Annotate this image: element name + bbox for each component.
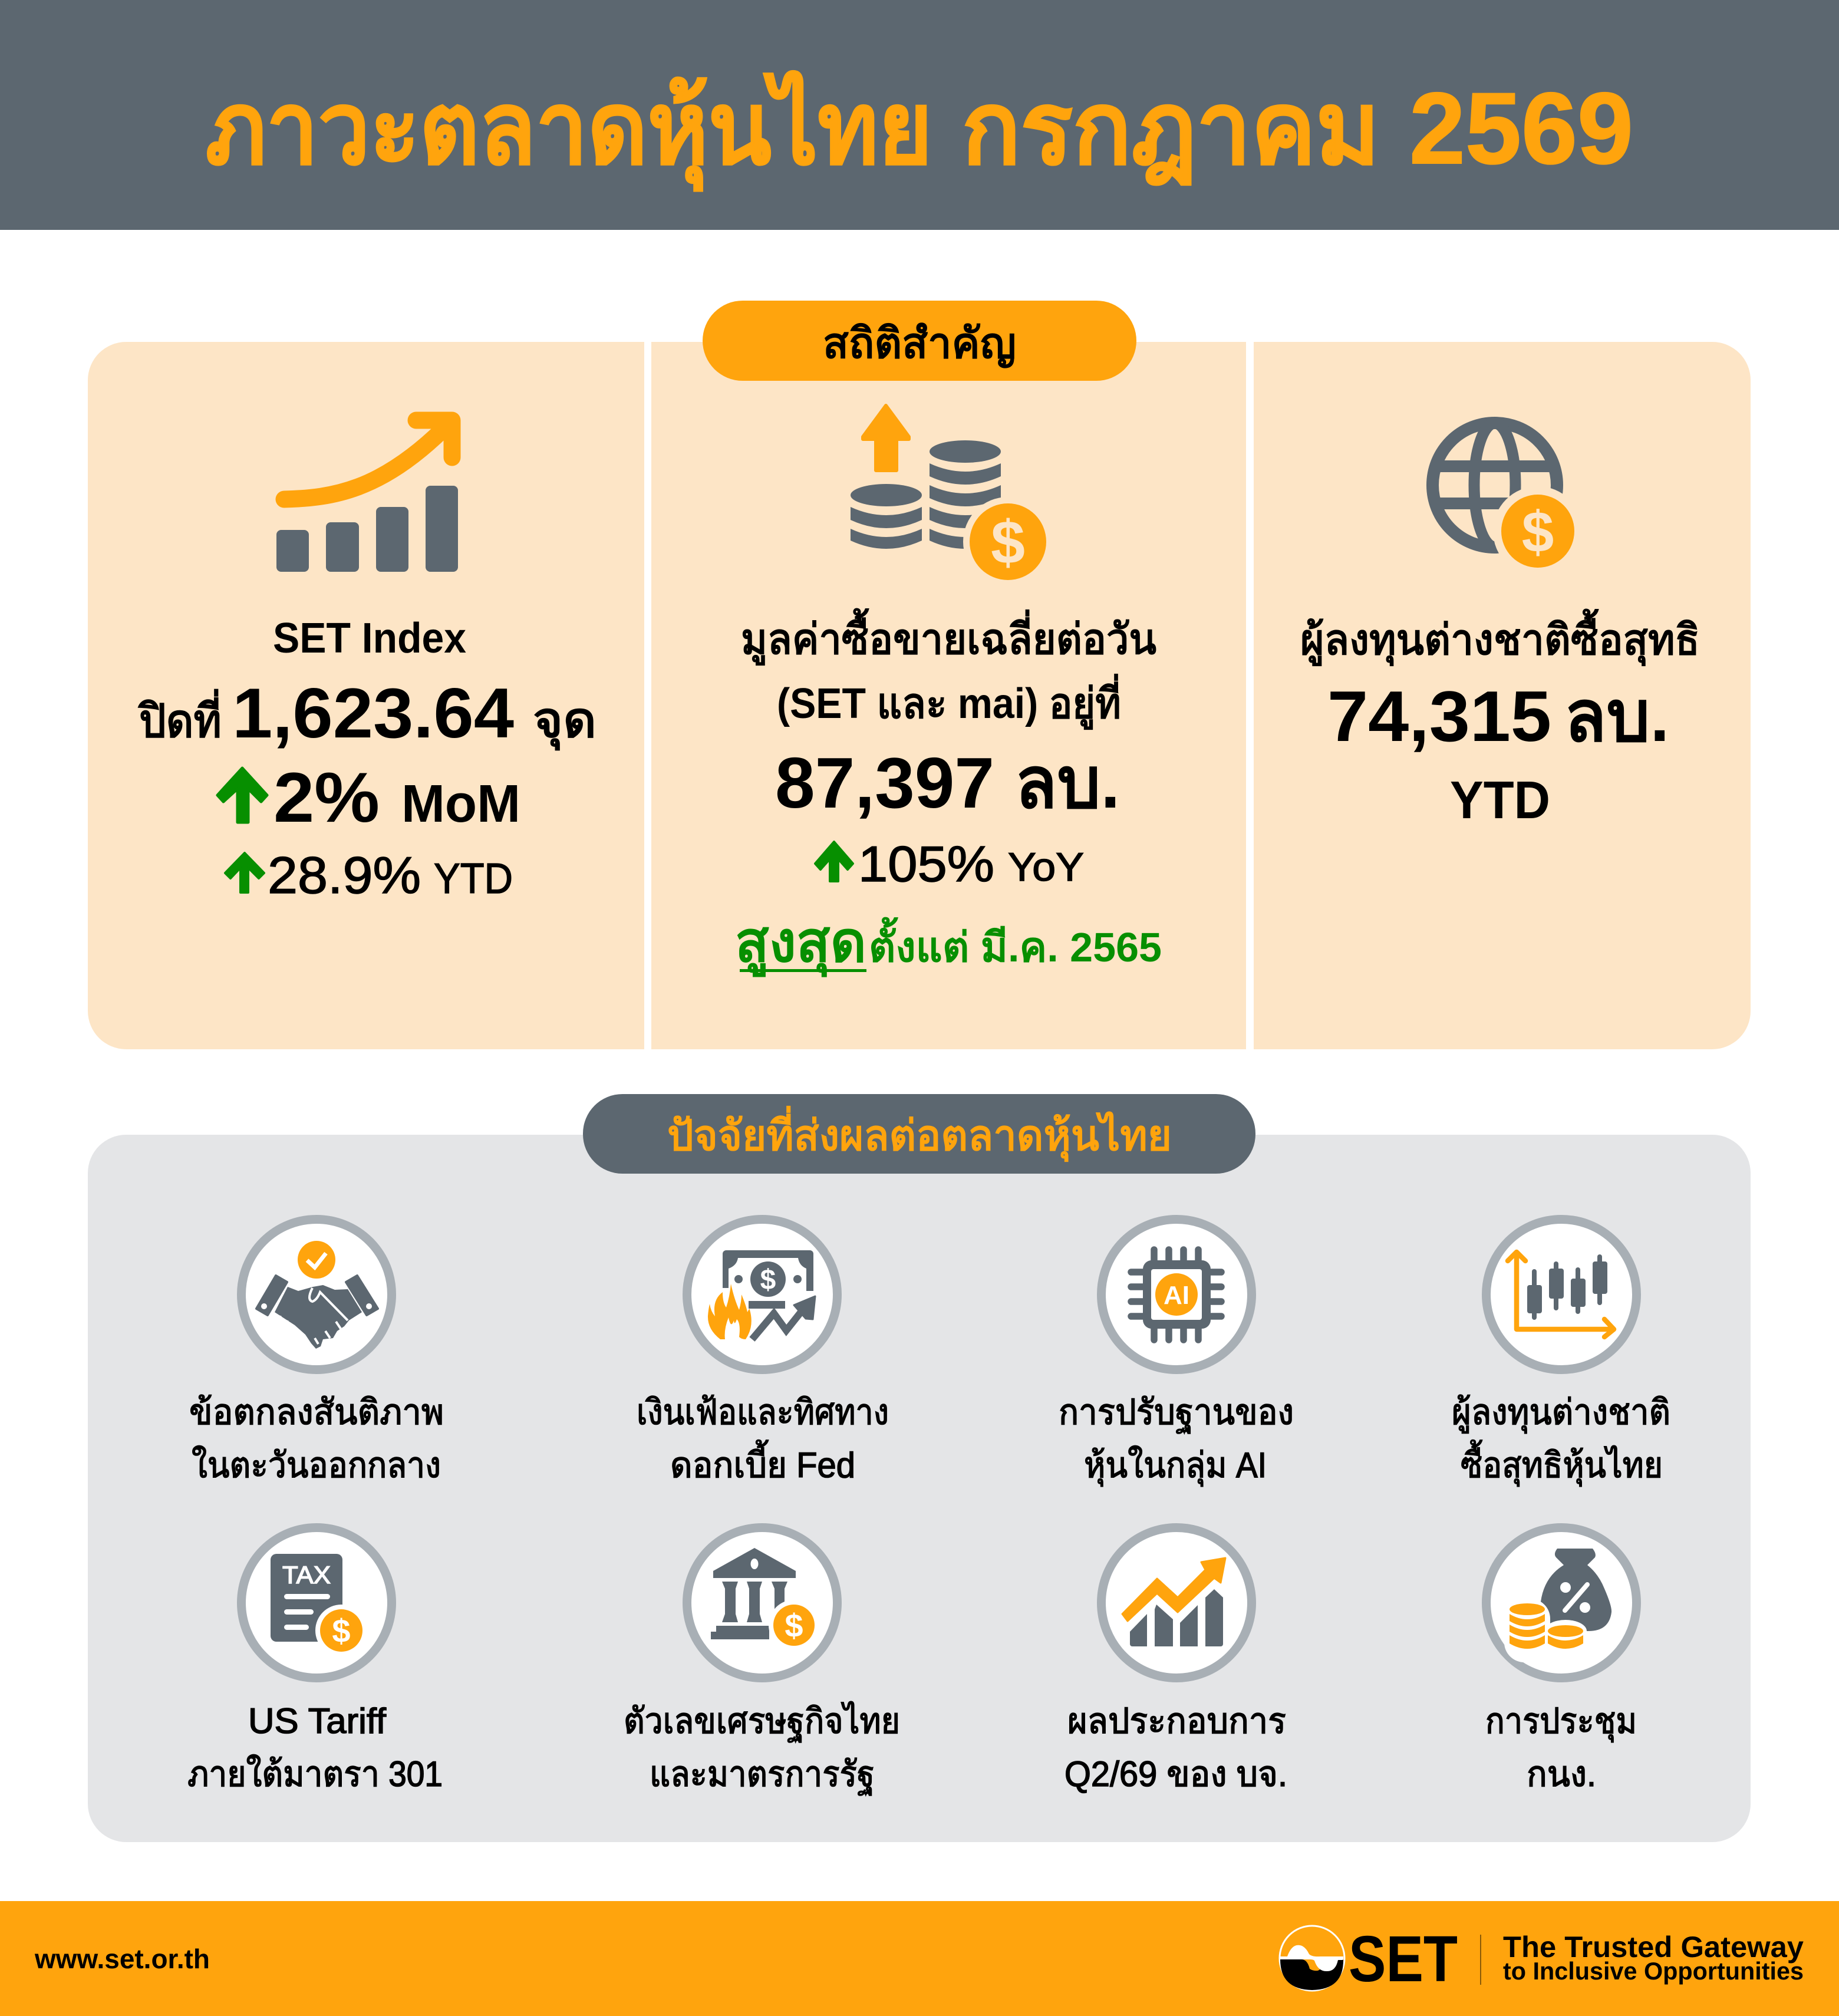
icon: tax document: $ [332, 1612, 351, 1649]
label [624, 1701, 900, 1796]
note: highest since March 2565: สูงสุด [735, 911, 866, 977]
label: average daily trading value [741, 608, 1156, 730]
label: foreign net buy: ผู้ลงทุนต่างชาติซื้อสุทธิ [1300, 608, 1700, 667]
label: average daily trading value: มูลค่าซื้อขายเฉลี่ยต่อวัน [741, 608, 1156, 666]
value: 74,315 [1327, 676, 1669, 756]
factor: Thai economy and state measures [624, 1528, 900, 1796]
icon: AI chip [1101, 1219, 1252, 1370]
stat card: foreign net buy [1300, 423, 1700, 830]
factor: inflation and Fed rate [637, 1219, 889, 1485]
factor: foreign net buy of Thai shares [1452, 1219, 1670, 1487]
label: เงินเฟ้อและทิศทาง [637, 1392, 889, 1432]
icon: AI chip: AI [1164, 1281, 1189, 1310]
icon: handshake [242, 1219, 391, 1370]
icon: tax document: TAX [282, 1561, 331, 1589]
icon: banknote flame chart: $ [760, 1264, 776, 1296]
label: Q2/69 ของ บจ. [1064, 1754, 1287, 1794]
title [206, 71, 1633, 192]
icon: bank with coin: $ [785, 1607, 803, 1644]
label: การประชุม [1485, 1701, 1637, 1742]
heading pill: market factors: ปัจจัยที่ส่งผลต่อตลาดหุ้นไทย [667, 1105, 1172, 1162]
closing value: 1,623.64 [232, 674, 514, 753]
label: ผลประกอบการ [1067, 1701, 1286, 1741]
change: YTD: 28.9% [268, 846, 421, 904]
change: YoY [858, 836, 1084, 892]
header band [0, 0, 1839, 230]
period: YTD: YTD [1450, 771, 1550, 830]
label: ซื้อสุทธิหุ้นไทย [1461, 1439, 1663, 1487]
arrow: up MoM [217, 768, 267, 822]
label: average daily trading value: (SET และ mai) อยู่ที่ [777, 673, 1121, 730]
arrow: up YoY [815, 842, 853, 881]
label: ในตะวันออกกลาง [192, 1445, 441, 1485]
factor: AI stock re-rating [1059, 1219, 1294, 1487]
tagline: The Trusted Gateway [1503, 1931, 1804, 1964]
icon: money bag with coins [1487, 1528, 1636, 1678]
label [1452, 1392, 1670, 1487]
title: ภาวะตลาดหุ้นไทย [206, 71, 932, 192]
change: YTD: YTD [434, 855, 513, 902]
icon: globe with coin [1432, 423, 1583, 576]
arrow: up YTD [225, 853, 264, 892]
change: YoY: YoY [1008, 845, 1084, 890]
icon: banknote flame chart [687, 1219, 837, 1370]
closing value [137, 674, 596, 753]
value: 87,397: 87,397 [775, 743, 994, 823]
icon: growth chart [1101, 1528, 1252, 1678]
icon: bank with coin [687, 1528, 837, 1678]
change: YTD [268, 846, 513, 904]
note: highest since March 2565 [735, 911, 1162, 977]
closing value: จุด [533, 692, 596, 751]
label: การปรับฐานของ [1059, 1392, 1294, 1434]
factor: Middle East peace deal [189, 1219, 444, 1485]
tagline [1503, 1931, 1804, 1985]
tagline: to Inclusive Opportunities [1503, 1957, 1804, 1985]
heading pill: key statistics [703, 301, 1136, 381]
change: MoM: 2% [273, 758, 380, 837]
label [1059, 1392, 1294, 1487]
label: หุ้นในกลุ่ม AI [1084, 1445, 1267, 1487]
icon: coin stacks with arrow: $ [991, 509, 1025, 577]
value: 74,315: ลบ. [1564, 676, 1669, 756]
label [1064, 1701, 1287, 1794]
value: 87,397: ลบ. [1015, 743, 1120, 823]
label: ข้อตกลงสันติภาพ [189, 1392, 444, 1432]
label: ดอกเบี้ย Fed [670, 1439, 855, 1485]
label: ภายใต้มาตรา 301 [187, 1754, 443, 1794]
label [637, 1392, 889, 1485]
stat card: SET Index [137, 420, 596, 904]
factor: US Tariff section 301 [187, 1528, 443, 1794]
label: SET Index: SET Index [273, 615, 466, 662]
icon: candlestick chart [1487, 1219, 1636, 1370]
label: ตัวเลขเศรษฐกิจไทย [624, 1701, 900, 1742]
closing value: ปิดที่ [137, 689, 222, 747]
logo divider [1480, 1935, 1481, 1985]
heading pill: market factors [583, 1094, 1255, 1174]
icon: coin stacks with arrow [851, 406, 1053, 587]
factor: MPC meeting [1485, 1528, 1637, 1794]
label: กนง. [1527, 1754, 1596, 1794]
icon: tax document [242, 1528, 391, 1678]
label [187, 1701, 443, 1794]
change: MoM: MoM [401, 775, 520, 834]
label: และมาตรการรัฐ [650, 1754, 875, 1796]
label: US Tariff [248, 1701, 386, 1741]
panel: key statistics [88, 342, 1751, 1049]
stat card: average daily trading value [735, 406, 1162, 977]
label [1485, 1701, 1637, 1794]
value: 87,397 [775, 743, 1120, 823]
title: กรกฎาคม [962, 72, 1380, 186]
change: MoM [273, 758, 520, 837]
label: ผู้ลงทุนต่างชาติ [1452, 1392, 1670, 1434]
website: www.set.or.th [34, 1943, 210, 1974]
footer band [0, 1901, 1839, 2016]
SET logo: SET [1349, 1923, 1458, 1995]
heading pill: key statistics: สถิติสำคัญ [823, 320, 1016, 368]
value: 74,315: 74,315 [1327, 676, 1551, 756]
label [189, 1392, 444, 1485]
change: YoY: 105% [858, 836, 994, 892]
note: highest since March 2565: ตั้งแต่ มี.ค. 2565 [869, 917, 1162, 970]
icon: globe with coin: $ [1522, 499, 1554, 564]
SET logo [1280, 1923, 1458, 1995]
icon: rising bar chart [276, 420, 458, 572]
factor: Q2/69 listed company results [1064, 1528, 1287, 1794]
title: 2569 [1409, 72, 1633, 185]
panel: market factors [88, 1135, 1751, 1842]
